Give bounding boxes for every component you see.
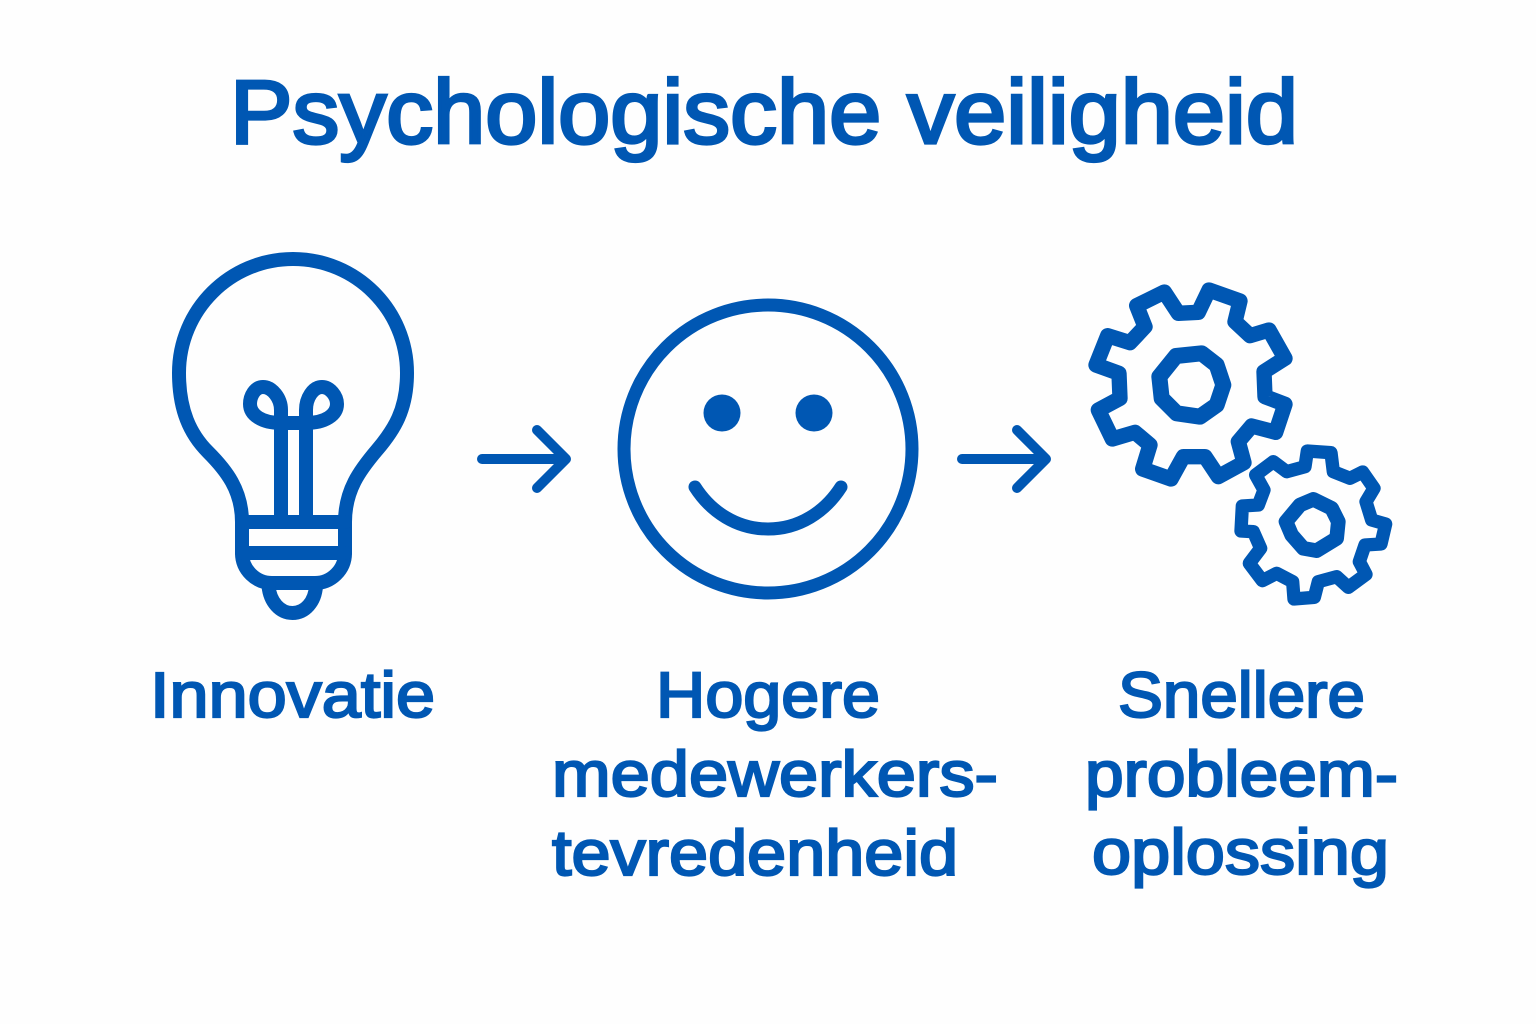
label: Hogere medewerkerstevredenheid <box>552 659 998 889</box>
label: Snellere probleemoplossing: oplossing <box>1092 816 1389 888</box>
label: Innovatie: Innovatie <box>150 659 435 731</box>
label: Hogere medewerkerstevredenheid: Hogere <box>656 659 880 731</box>
arrow: innovation to satisfaction <box>482 430 566 488</box>
label: Snellere probleemoplossing: probleem- <box>1085 738 1398 810</box>
icon: gears <box>1096 290 1386 599</box>
icon: smiley face <box>624 305 912 593</box>
label: Snellere probleemoplossing <box>1085 659 1398 888</box>
label: Snellere probleemoplossing: Snellere <box>1118 659 1365 731</box>
arrow: satisfaction to problem solving <box>962 430 1046 488</box>
label: Hogere medewerkerstevredenheid: medewerkers- <box>552 738 998 810</box>
label: Hogere medewerkerstevredenheid: tevredenheid <box>552 817 958 889</box>
title: Psychologische veiligheid <box>230 63 1298 163</box>
icon: light bulb <box>179 259 407 613</box>
